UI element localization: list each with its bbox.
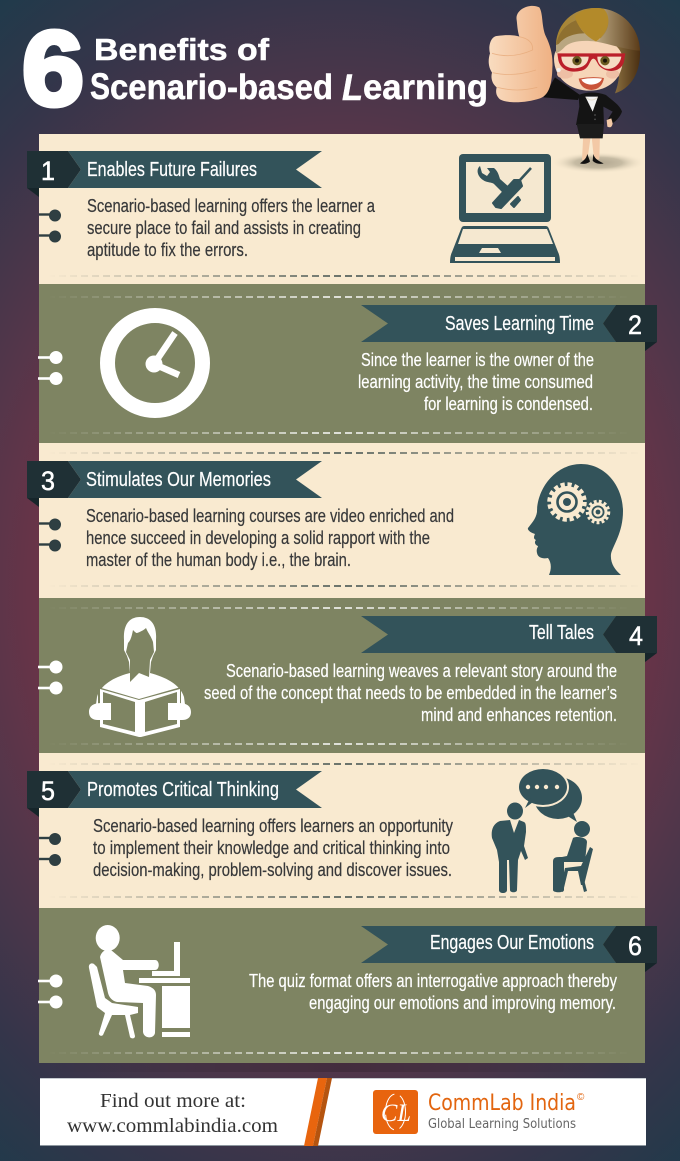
ribbon heading 4: [361, 616, 657, 662]
icon: laptop with tools: [450, 154, 560, 263]
ribbon heading 5: 5: [41, 776, 55, 806]
connector pins: [39, 519, 60, 551]
ribbon heading 3: [27, 461, 322, 507]
body text 5: [93, 816, 453, 880]
big numeral 6: 6: [22, 10, 84, 128]
title line 2: earning: [363, 68, 488, 107]
connector pins: [39, 210, 60, 242]
title line 2: [90, 66, 488, 108]
ribbon heading 6: 6: [628, 931, 642, 961]
icon: person reading a book: [89, 617, 191, 738]
connector pins: [38, 975, 62, 1008]
body text 5: decision-making, problem-solving and discover issues.: [93, 860, 452, 880]
body text 3: hence succeed in developing a solid rapport with the: [86, 528, 430, 548]
footer call to action: [67, 1090, 278, 1137]
panel: stimulates our memories: [27, 443, 645, 598]
body text 6: [249, 971, 617, 1013]
body text 2: learning activity, the time consumed: [358, 372, 593, 392]
orange slash: [304, 1078, 332, 1146]
title line 2: L: [342, 67, 363, 108]
footer call to action: www.commlabindia.com: [67, 1115, 278, 1137]
character: businesswoman giving a thumbs up: [489, 6, 646, 173]
body text 4: [204, 661, 617, 725]
ribbon heading 2: Saves Learning Time: [445, 313, 594, 335]
icon: two people talking: [492, 767, 593, 893]
title line 2: cenario-based: [110, 68, 333, 107]
ribbon heading 1: Enables Future Failures: [87, 159, 257, 181]
panel: tell tales: [38, 598, 657, 753]
ribbon heading 5: Promotes Critical Thinking: [87, 779, 279, 801]
icon: head with gears: [528, 464, 623, 575]
ribbon heading 1: [27, 151, 322, 197]
body text 2: Since the learner is the owner of the: [361, 350, 594, 370]
body text 3: [86, 506, 454, 570]
CommLab logo: Global Learning Solutions: [428, 1117, 576, 1132]
footer call to action: Find out more at:: [100, 1090, 246, 1112]
ribbon heading 6: [361, 926, 657, 972]
connector pins: [38, 352, 62, 384]
panel: engages our emotions: [38, 908, 657, 1063]
panel: saves learning time: [38, 284, 657, 443]
body text 1: Scenario-based learning offers the learner a: [87, 196, 376, 216]
footer: [39, 1063, 646, 1146]
body text 2: [358, 350, 594, 414]
body text 4: mind and enhances retention.: [421, 705, 617, 725]
panel: enables future failures: [27, 134, 645, 284]
connector pins: [38, 661, 62, 694]
ribbon heading 6: Engages Our Emotions: [430, 932, 594, 954]
body text 1: secure place to fail and assists in creating: [87, 218, 361, 238]
connector pins: [39, 834, 60, 866]
ribbon heading 3: 3: [41, 466, 55, 496]
CommLab logo: [373, 1090, 585, 1134]
title: [22, 10, 488, 128]
ribbon heading 5: [27, 771, 322, 817]
CommLab logo: CL: [381, 1100, 411, 1127]
ribbon heading 1: 1: [41, 156, 55, 186]
icon: person at a desk: [89, 925, 190, 1038]
ribbon heading 3: Stimulates Our Memories: [86, 469, 271, 491]
CommLab logo: CommLab India: [428, 1091, 576, 1116]
body text 6: engaging our emotions and improving memory.: [309, 993, 616, 1013]
title line 1: Benefits of: [94, 32, 270, 67]
ribbon heading 2: 2: [628, 310, 642, 340]
panel: promotes critical thinking: [27, 753, 645, 908]
body text 1: aptitude to fix the errors.: [87, 240, 248, 260]
body text 2: for learning is condensed.: [424, 394, 593, 414]
icon: clock: [108, 316, 202, 410]
body text 3: Scenario-based learning courses are video enriched and: [86, 506, 454, 526]
ribbon heading 4: 4: [629, 621, 643, 651]
body text 1: [87, 196, 376, 260]
ribbon heading 2: [361, 305, 657, 351]
body text 5: Scenario-based learning offers learners an opportunity: [93, 816, 453, 836]
body text 3: master of the human body i.e., the brain.: [86, 550, 351, 570]
ribbon heading 4: Tell Tales: [529, 622, 594, 644]
body text 5: to implement their knowledge and critical thinking into: [93, 838, 450, 858]
CommLab logo: ©: [577, 1092, 585, 1103]
title line 2: S: [90, 66, 110, 107]
